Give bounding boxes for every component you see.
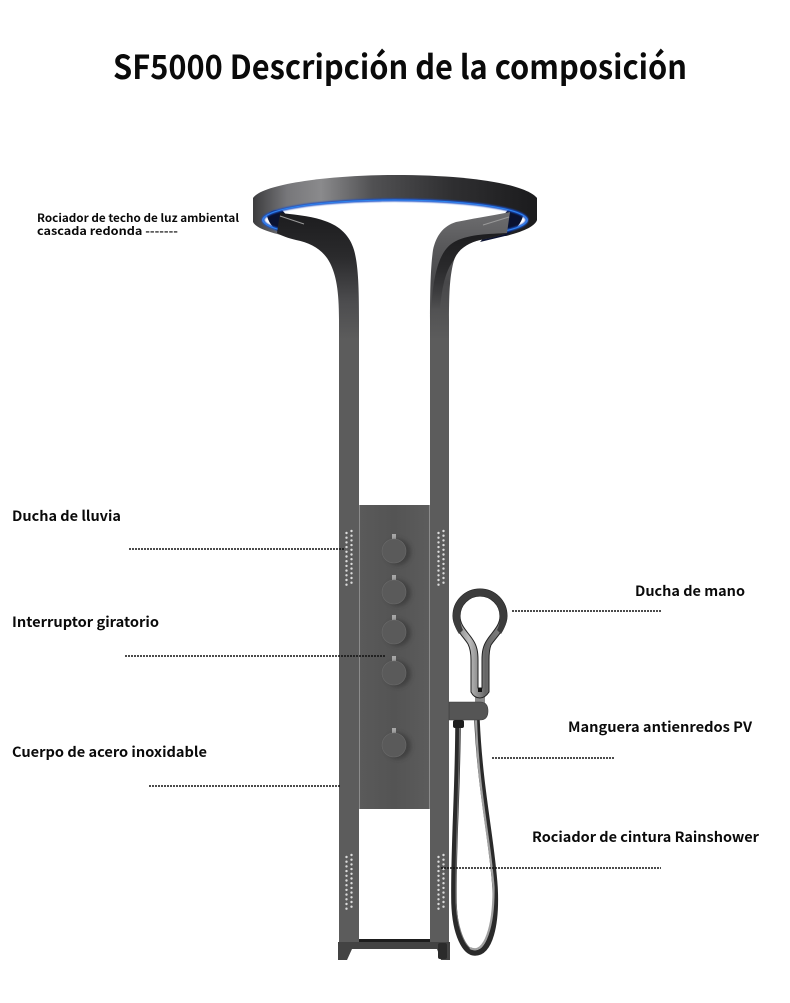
upper spray nozzles (346, 531, 444, 588)
label: PV anti-tangle hose: Manguera antienredos PV (568, 717, 752, 737)
shower panel product illustration (253, 175, 537, 960)
label: rotary switch: Interruptor giratorio (12, 612, 159, 632)
label: hand shower: Ducha de mano (635, 581, 745, 601)
hand shower (453, 589, 507, 703)
wall mount bracket (449, 702, 488, 728)
label: stainless steel body: Cuerpo de acero inoxidable (12, 742, 207, 762)
rotary knobs (382, 534, 411, 759)
label: rain shower: Ducha de lluvia (12, 506, 121, 526)
ceiling ring shower (253, 175, 537, 242)
label: waist rainshower: Rociador de cintura Rainshower (532, 827, 760, 847)
right column (430, 212, 510, 945)
lower spray nozzles (346, 855, 444, 912)
label: ambient light ceiling shower: cascada redonda ------- (37, 223, 178, 239)
hose (454, 720, 495, 953)
base (338, 939, 450, 960)
label: ambient light ceiling shower (37, 210, 240, 239)
arm nozzle highlights (280, 216, 509, 225)
left column (277, 213, 359, 945)
right arm underside shadow (431, 233, 507, 310)
label: ambient light ceiling shower: Rociador de techo de luz ambiental (37, 210, 240, 226)
control panel (359, 505, 430, 809)
title: SF5000 Descripción de la composición (113, 41, 687, 89)
